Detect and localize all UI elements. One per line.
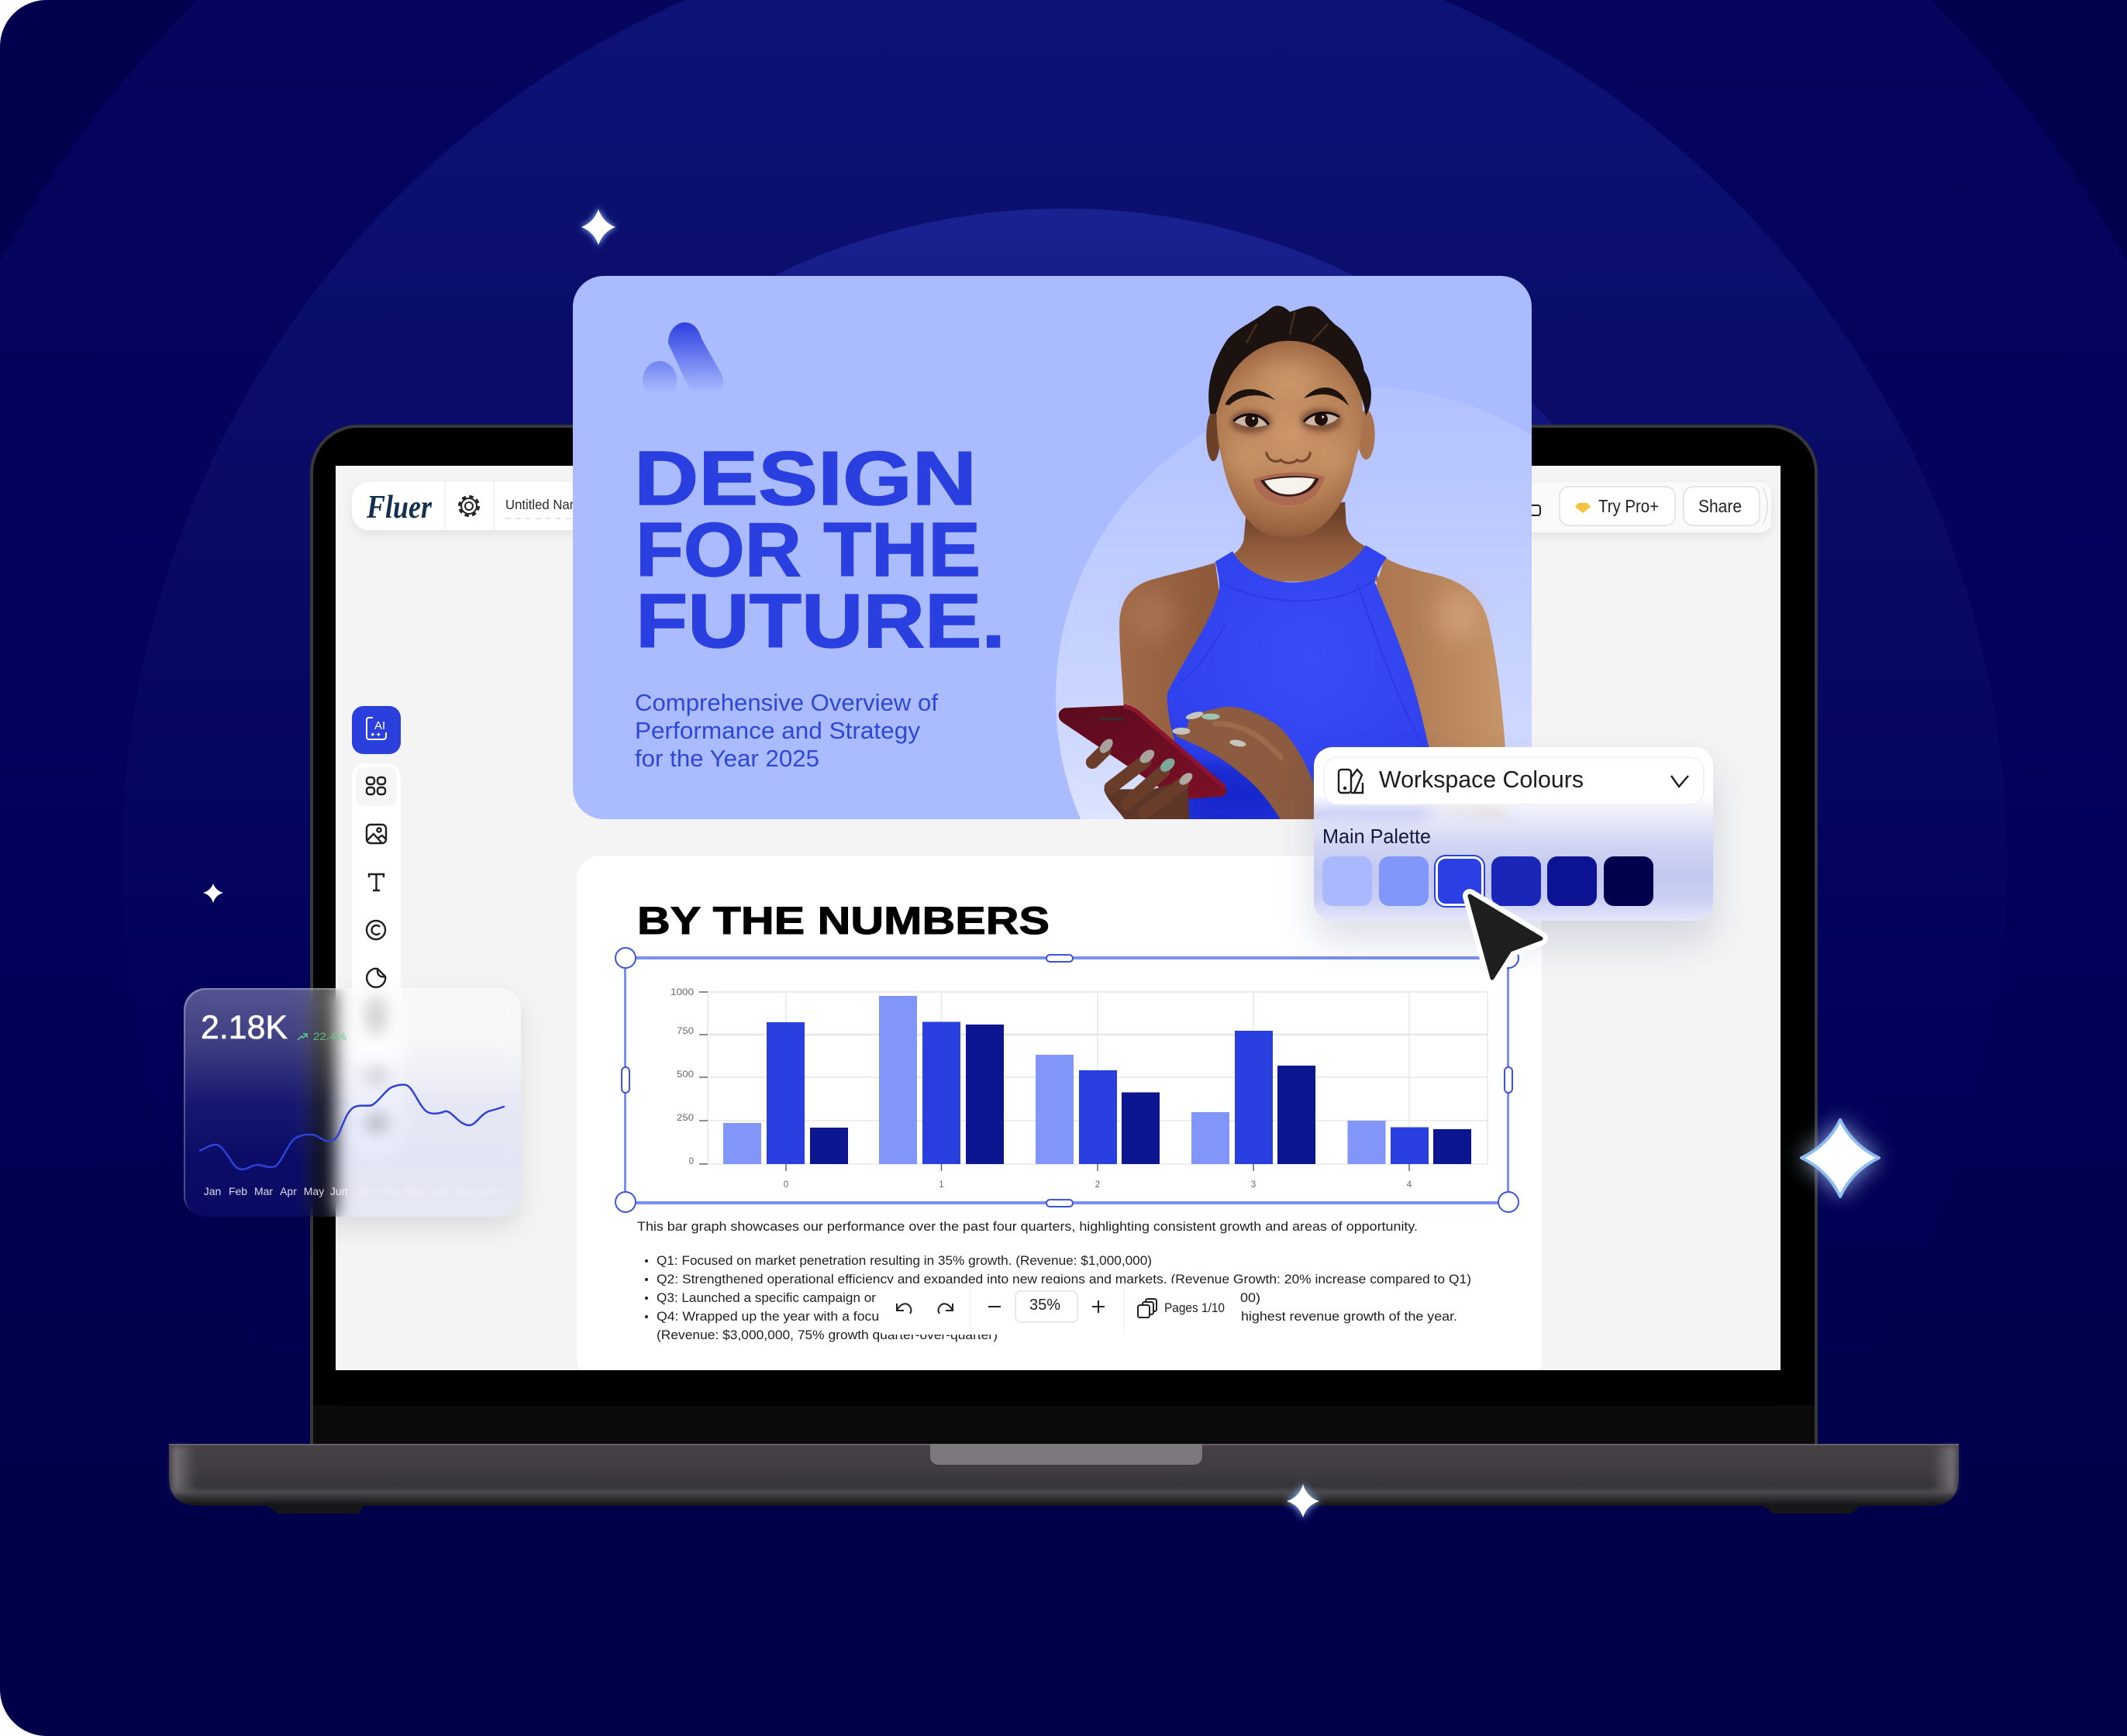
y axis labels: 1000 (671, 988, 694, 997)
bottom zoom toolbar (878, 1283, 1238, 1335)
chart description text: 00) (1240, 1290, 1260, 1305)
chart description text: Q4: Wrapped up the year with a focus (657, 1309, 886, 1324)
button: share (1684, 487, 1760, 525)
panel: hero card (573, 276, 1532, 825)
cheek and nose highlights (1237, 362, 1340, 466)
x axis labels: 3 (1251, 1180, 1256, 1190)
document page (577, 856, 1542, 1383)
series light (723, 996, 1386, 1164)
zoom value: 35% (1029, 1297, 1060, 1314)
button: try pro: Try Pro+ (1598, 496, 1659, 516)
hero light circle (1056, 401, 1532, 819)
line chart (200, 1085, 504, 1169)
face (1216, 332, 1363, 539)
pages label: Pages 1/10 (1164, 1300, 1225, 1315)
neck (1222, 502, 1380, 582)
icon: pages (1138, 1299, 1157, 1318)
hero title: FUTURE. (636, 578, 1005, 663)
icon: grid (367, 777, 385, 794)
zoom value (1015, 1291, 1077, 1322)
eyes (1230, 408, 1342, 433)
icon: palette (1339, 770, 1363, 793)
star: right large glow (1800, 1118, 1881, 1198)
hand touching phone (1172, 707, 1315, 821)
month labels: May (304, 1185, 324, 1197)
button: AI: AI (374, 719, 385, 732)
x axis labels (784, 1180, 1412, 1190)
app top bar left (352, 482, 600, 530)
heading: by the numbers: BY THE NUMBERS (637, 899, 1050, 942)
axis ticks (699, 992, 1409, 1171)
y axis labels: 0 (689, 1157, 694, 1166)
month labels (204, 1185, 500, 1197)
icon: sticker (367, 969, 385, 987)
app top bar right (1473, 482, 1771, 532)
month labels: Oct (432, 1185, 449, 1197)
month labels: Dec (481, 1185, 500, 1197)
month labels: Sep (405, 1185, 425, 1197)
x axis labels: 0 (784, 1180, 788, 1190)
bar chart (671, 988, 1488, 1190)
laptop base (169, 1444, 1959, 1514)
hero title (634, 436, 1005, 663)
plot grid (708, 992, 1488, 1164)
project name: Untitled Name (505, 497, 588, 512)
button: share: Share (1698, 496, 1742, 516)
chart description text: Q2: Strengthened operational efficiency and expanded into new regions and markets. (Revenue Growth: 20% increase compared to Q1) (657, 1272, 1471, 1286)
icon: redo (938, 1304, 953, 1314)
x axis labels: 2 (1095, 1180, 1100, 1190)
app screen (336, 466, 1781, 1370)
brand wordmark: Fluer (366, 490, 433, 525)
icon: minus (988, 1306, 1001, 1307)
panel: workspace colours (1314, 747, 1713, 921)
button: AI (352, 706, 401, 754)
chart description text: This bar graph showcases our performance over the past four quarters, highlighting consistent growth and areas of opportunity. (637, 1219, 1418, 1234)
laptop lid (312, 426, 1816, 1445)
star: top left (581, 208, 616, 246)
star: bottom center (1285, 1483, 1321, 1519)
icon: text (369, 874, 384, 890)
chart description text (637, 1219, 1471, 1342)
x axis labels: 4 (1407, 1180, 1412, 1190)
month labels: Apr (280, 1185, 297, 1197)
star: left small (203, 884, 223, 903)
y axis labels: 500 (677, 1070, 694, 1080)
palette shadow (1314, 747, 1713, 921)
chart description text: highest revenue growth of the year. (1241, 1309, 1457, 1324)
portrait: smiling woman with phone (1059, 306, 1506, 821)
palette label: Main Palette (1322, 825, 1431, 848)
y axis labels: 750 (677, 1027, 694, 1036)
nose (1267, 453, 1310, 463)
hero subtitle (635, 689, 938, 772)
icon: undo (897, 1304, 912, 1314)
x axis labels: 1 (939, 1180, 944, 1190)
month labels: Jun (330, 1185, 347, 1197)
icon: brand logo (643, 322, 723, 398)
month labels: Mar (254, 1185, 273, 1197)
selection frame (615, 948, 1519, 1212)
hand holding phone (1092, 736, 1194, 821)
dropdown header: Workspace Colours (1379, 766, 1584, 793)
blue dress (1167, 546, 1429, 821)
panel: stats card (184, 988, 521, 1217)
ears (1206, 412, 1220, 461)
hero subtitle: for the Year 2025 (635, 745, 819, 772)
left tool rail (352, 706, 401, 1151)
trend indicator: 22.4% (313, 1030, 346, 1042)
icon: copyright (367, 921, 385, 939)
arrow: mouse cursor (1470, 896, 1541, 978)
shoulders and arms (1119, 557, 1506, 821)
chart description text: (Revenue: $3,000,000, 75% growth quarter-over-quarter) (657, 1328, 998, 1342)
month labels: Feb (229, 1185, 247, 1197)
month labels: Jul (357, 1185, 371, 1197)
icon: plus (1092, 1300, 1105, 1313)
icon: small status (1530, 505, 1540, 515)
smile (1253, 472, 1325, 505)
series dark (810, 1025, 1471, 1164)
icon: blurred tools (366, 998, 387, 1131)
month labels: Jan (204, 1185, 221, 1197)
icon: image (367, 825, 386, 843)
dropdown header (1324, 757, 1704, 804)
trend indicator (298, 1030, 346, 1042)
phone (1059, 705, 1226, 800)
stat value: 2.18K (201, 1009, 288, 1046)
chart description text: Q3: Launched a specific campaign or (657, 1290, 876, 1305)
series mid (767, 1021, 1429, 1164)
icon: chevron (1671, 776, 1688, 787)
button: AI: ✦✦ (370, 731, 382, 739)
hero title: FOR THE (636, 507, 981, 592)
laptop (169, 426, 1959, 1514)
month labels: Aug (381, 1185, 399, 1197)
hero subtitle: Comprehensive Overview of (635, 689, 938, 716)
icon: settings gear (459, 496, 479, 516)
button: try pro (1560, 487, 1675, 525)
hero title: DESIGN (634, 436, 977, 521)
panel: tools (352, 763, 401, 1151)
eyebrows (1225, 389, 1276, 405)
braided hair (1208, 306, 1371, 415)
y axis labels: 250 (677, 1114, 694, 1123)
month labels: Nov (457, 1185, 475, 1197)
hero subtitle: Performance and Strategy (635, 717, 921, 744)
chart description text: Q1: Focused on market penetration resulting in 35% growth. (Revenue: $1,000,000) (657, 1253, 1152, 1268)
swatches (1322, 856, 1653, 907)
y axis labels (671, 988, 694, 1166)
